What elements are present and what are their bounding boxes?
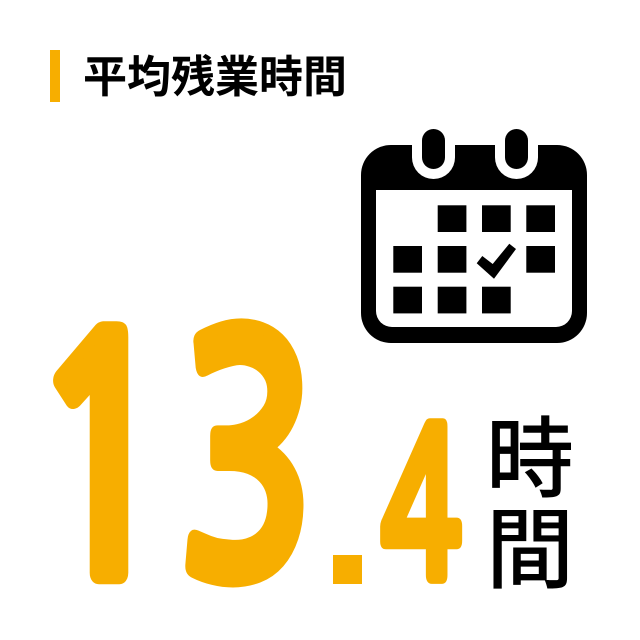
unit: 時間: 間 [486, 501, 574, 600]
big number: 13.4: 1 [26, 301, 181, 625]
icon: calendar with check mark [361, 129, 587, 343]
title: 平均残業時間 [83, 53, 347, 102]
big number: 13.4: 3 [176, 300, 318, 627]
heading accent bar [50, 50, 60, 102]
unit: 時間: 時 [486, 410, 574, 509]
big number: 13.4 [26, 300, 462, 627]
unit: 時間 [486, 410, 574, 600]
big number: 13.4: 4 [380, 406, 462, 609]
